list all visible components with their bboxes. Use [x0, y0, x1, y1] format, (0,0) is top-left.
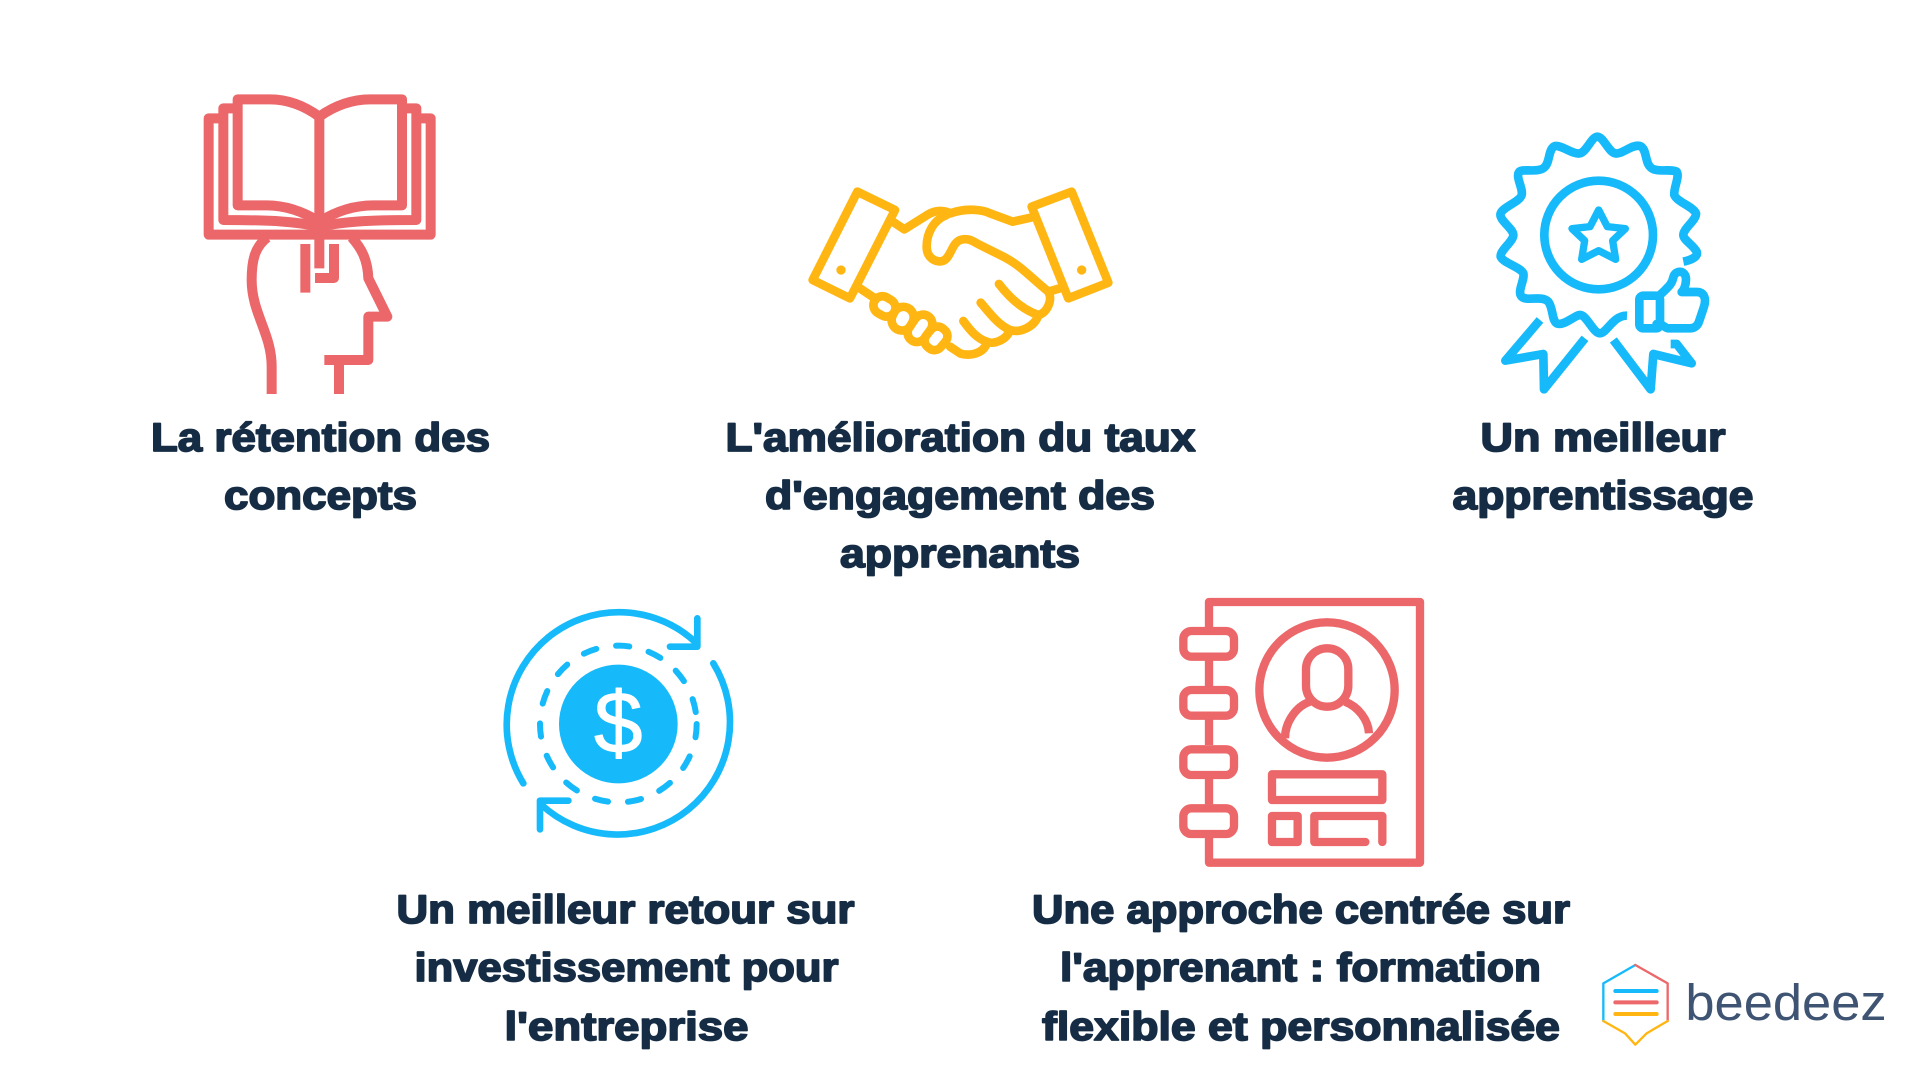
heading: learner-centred approach — [1032, 888, 1570, 1049]
heading: retention: concepts — [224, 474, 417, 518]
heading: better learning: Un meilleur — [1480, 416, 1726, 460]
heading: learner-centred approach: flexible et personnalisée — [1042, 1005, 1560, 1049]
heading: better learning: apprentissage — [1452, 474, 1754, 518]
heading: return on investment — [396, 888, 854, 1049]
icon: book above head — [209, 99, 431, 394]
heading: retention — [151, 416, 490, 518]
heading: retention: La rétention des — [151, 416, 490, 460]
icon: handshake — [813, 192, 1108, 355]
heading: engagement — [726, 416, 1196, 576]
heading: learner-centred approach: Une approche centrée sur — [1032, 888, 1570, 932]
heading: engagement: d'engagement des — [765, 474, 1155, 518]
heading: better learning — [1452, 416, 1754, 518]
icon: return on investment dollar: $ — [594, 674, 643, 772]
logo: beedeez — [1603, 965, 1887, 1045]
icon: contact notebook — [1183, 602, 1420, 863]
icon: award ribbon with thumb up — [1500, 137, 1705, 389]
heading: return on investment: l'entreprise — [504, 1005, 748, 1049]
heading: engagement: L'amélioration du taux — [726, 416, 1196, 460]
heading: learner-centred approach: l'apprenant : formation — [1060, 946, 1541, 990]
heading: return on investment: Un meilleur retour sur — [396, 888, 854, 932]
icon: return on investment dollar — [507, 612, 730, 835]
heading: engagement: apprenants — [840, 532, 1080, 576]
heading: return on investment: investissement pour — [414, 946, 838, 990]
logo hexagon — [1603, 965, 1668, 1045]
logo: beedeez: beedeez — [1685, 974, 1887, 1031]
